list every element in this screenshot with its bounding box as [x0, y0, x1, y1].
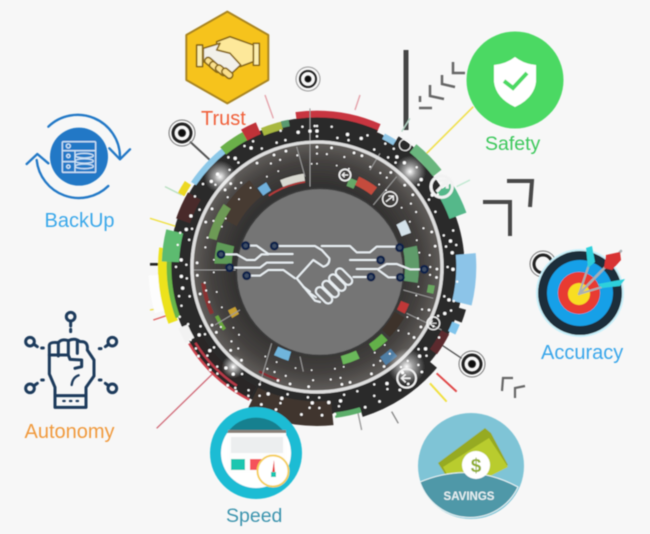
shield: [494, 57, 536, 107]
backup icon: [27, 115, 130, 198]
safety icon: [466, 32, 564, 128]
target marker: accuracy side: [530, 251, 556, 277]
gauge: [258, 456, 288, 486]
autonomy fist icon: [26, 312, 117, 407]
savings icon: [418, 413, 524, 519]
label: Safety: Safety: [485, 133, 541, 155]
banknotes: [438, 428, 508, 490]
darts: [579, 251, 622, 294]
label: Trust: Trust: [201, 108, 246, 130]
label: BackUp: BackUp: [44, 210, 115, 232]
ray lines: [150, 95, 473, 430]
server glyph: [62, 142, 96, 172]
target marker: lower right: [459, 351, 485, 377]
check mark: [504, 73, 527, 88]
network nodes: [66, 312, 75, 321]
central circular dial: [154, 104, 480, 430]
trust hexagon icon: [186, 12, 268, 103]
outer colour segments: [154, 104, 480, 430]
circuit nodes: [218, 242, 428, 281]
target marker: upper left: [169, 120, 195, 146]
savings band: [420, 473, 518, 517]
target marker: top: [296, 67, 320, 91]
accuracy target icon: [536, 246, 625, 337]
savings caption: SAVINGS: [444, 491, 495, 503]
label: Accuracy: Accuracy: [541, 342, 623, 364]
glare highlights: [204, 156, 426, 385]
spokes: [193, 108, 442, 383]
fist: [49, 339, 94, 395]
handshake outline: [297, 250, 354, 305]
browser window: [228, 430, 286, 472]
circled arrow markers: [339, 139, 452, 388]
outer dark band: [181, 131, 453, 403]
circular arrows: [27, 115, 130, 198]
circuit traces: [221, 246, 424, 278]
star dots: [169, 119, 465, 415]
label: Autonomy: Autonomy: [24, 421, 115, 443]
circuit handshake: [218, 242, 428, 305]
handshake glyph: [197, 37, 259, 80]
inner colour segments: [198, 148, 436, 386]
inner dark band: [192, 142, 442, 392]
white ring: [192, 142, 442, 392]
label: Speed: Speed: [226, 505, 282, 527]
centre grey disc: [237, 189, 403, 355]
dollar sign: $: [471, 456, 482, 477]
speed icon: [210, 407, 302, 499]
decorative chevrons and bar: [406, 50, 532, 398]
